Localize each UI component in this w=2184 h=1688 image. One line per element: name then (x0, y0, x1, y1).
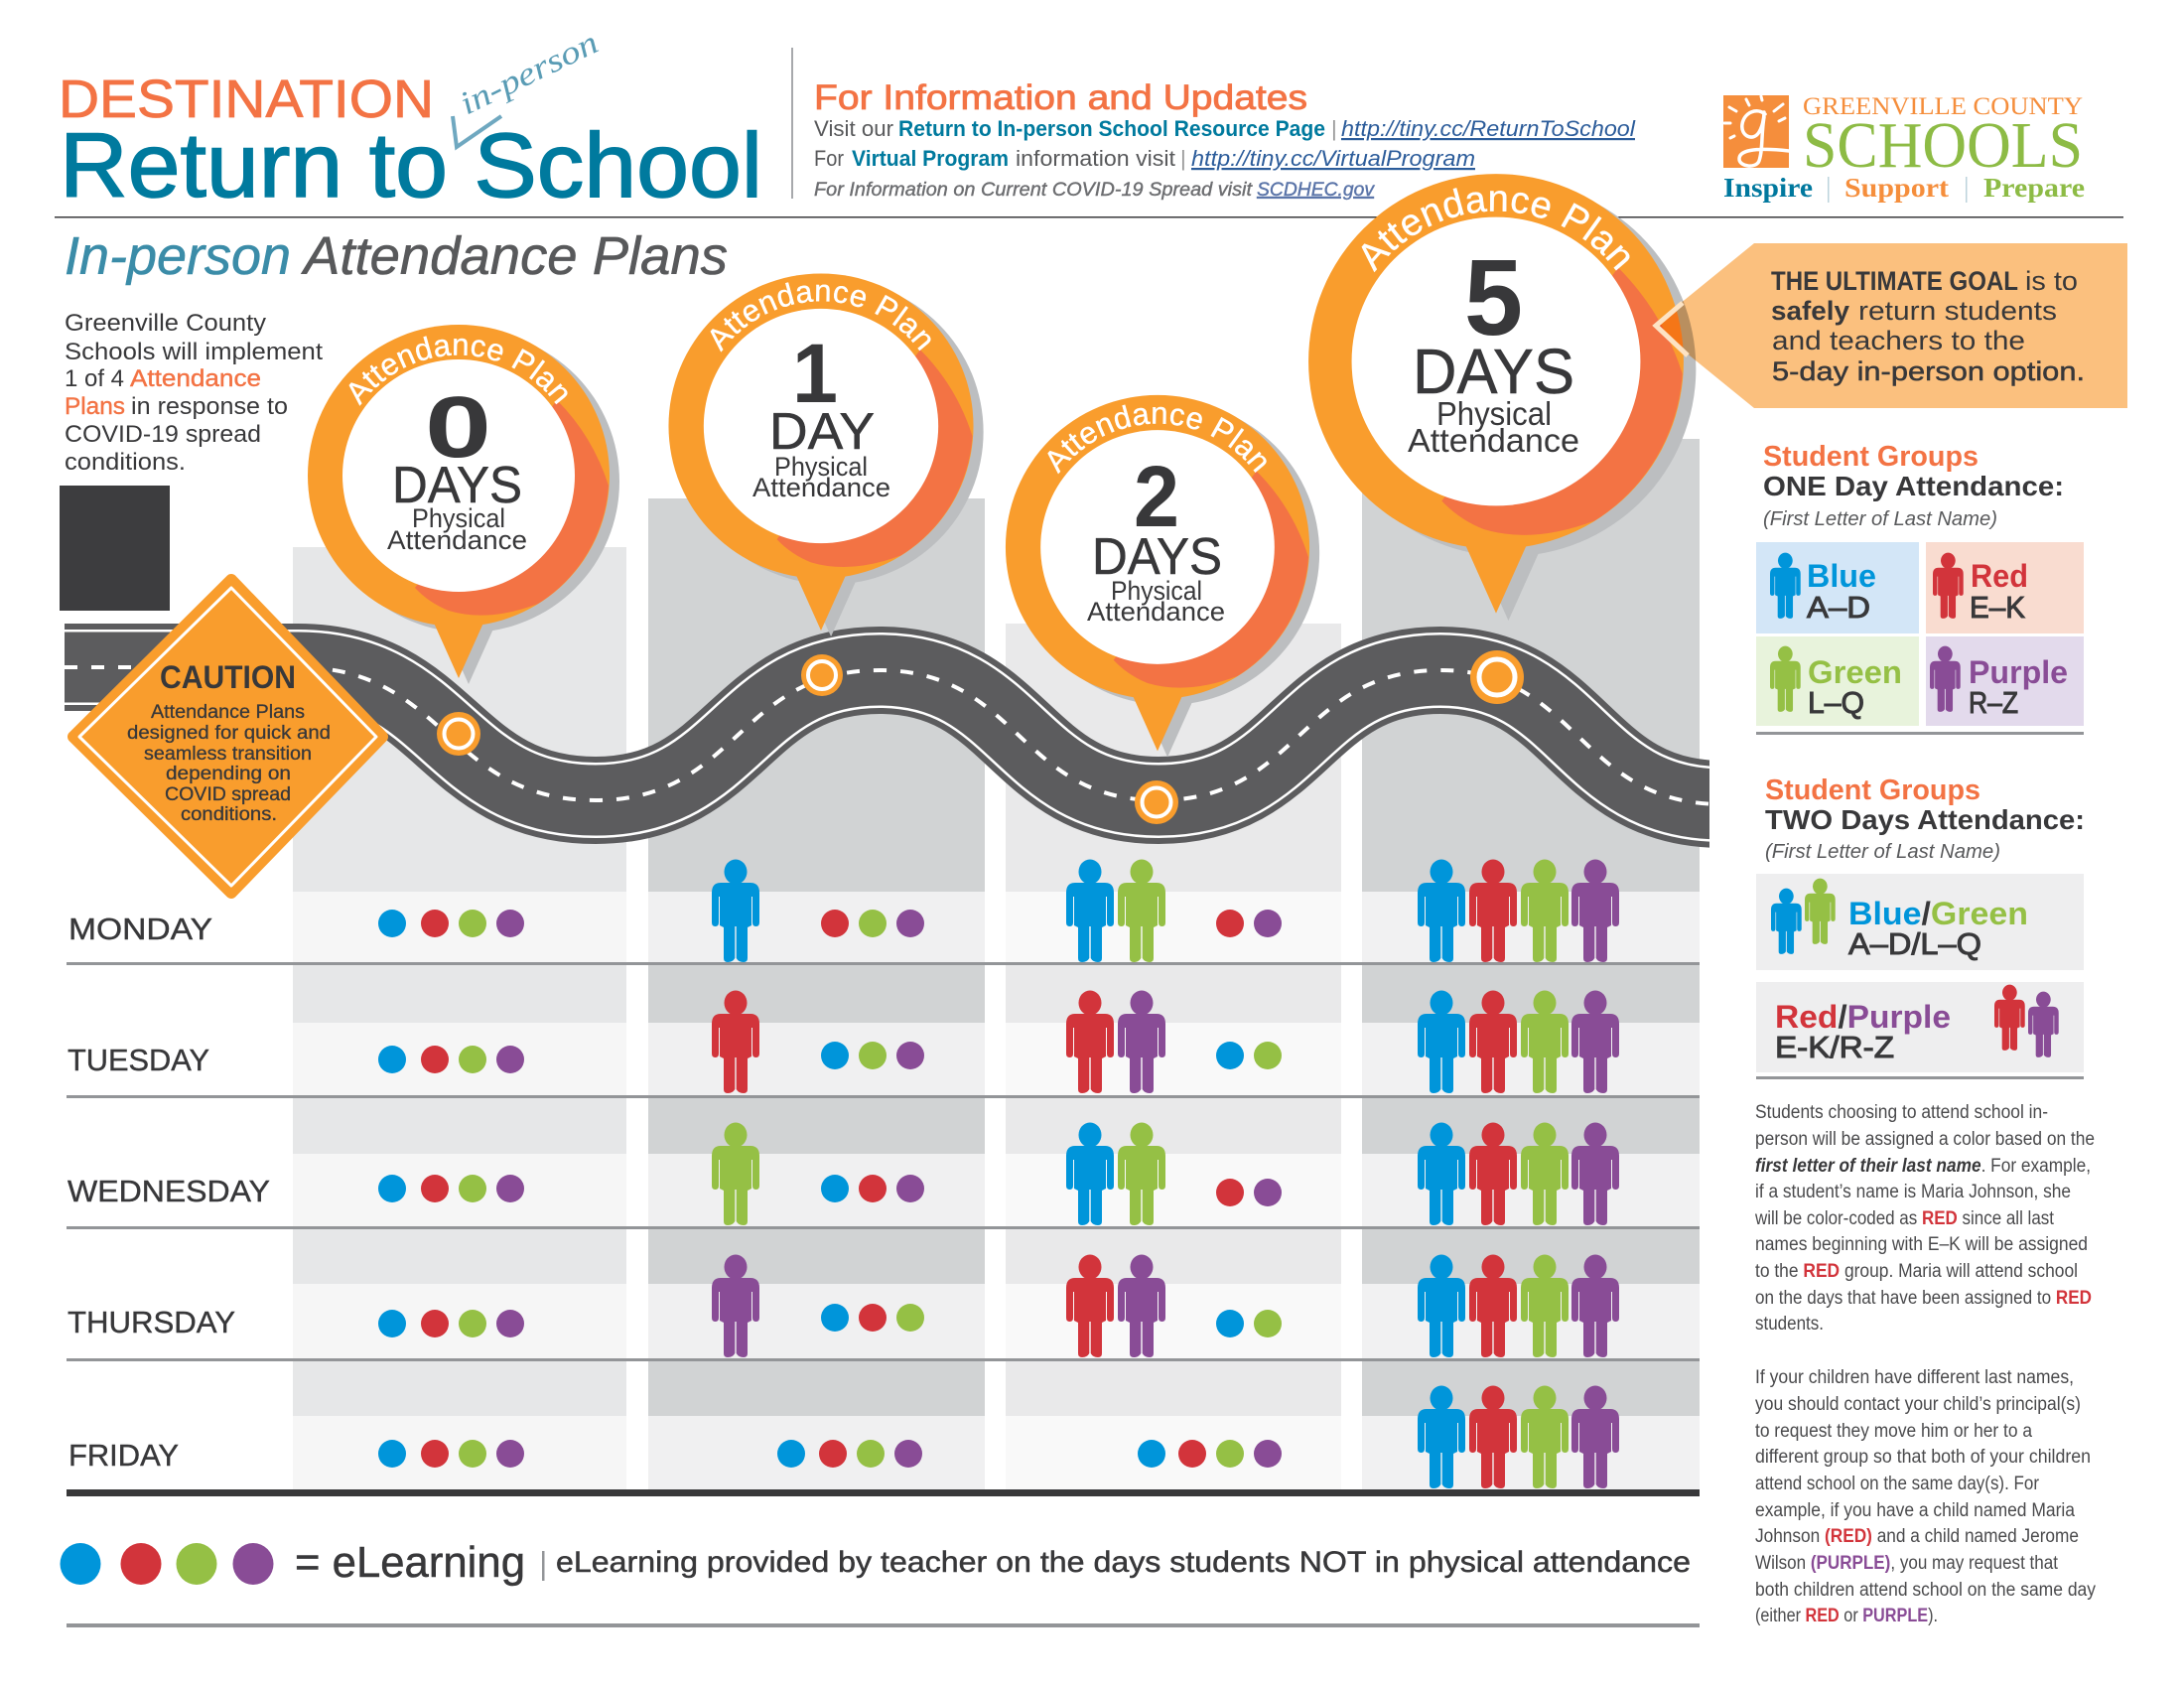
pin: 2 days: 2 (1134, 449, 1179, 545)
caution diamond: designed for quick and (127, 723, 331, 744)
row label: Thursday: THURSDAY (68, 1305, 235, 1339)
icon: sun and g (1723, 95, 1789, 168)
row label: Tuesday: TUESDAY (68, 1043, 209, 1077)
row label: Monday: MONDAY (68, 912, 212, 946)
heading: In-person Attendance Plans: Attendance Plans (301, 226, 728, 286)
group: blue and green (1756, 874, 2084, 970)
group: purple: R–Z (1969, 685, 2018, 720)
virtual program line: information visit (1016, 146, 1175, 171)
caution diamond: conditions. (181, 804, 277, 825)
marker: plan 1 road stop (801, 654, 843, 696)
text block: intro: conditions. (65, 449, 186, 476)
caution diamond (73, 580, 382, 893)
pin: 0 days (308, 325, 619, 684)
tagline: Inspire Support Prepare: Inspire (1723, 173, 1813, 203)
marker: plan 2 road stop (1135, 780, 1178, 824)
marker: plan 5 road stop (1470, 650, 1524, 704)
text block: intro: 1 of 4 (65, 365, 124, 392)
group: blue and green: A–D/L–Q (1848, 926, 1981, 961)
legend: elearning: = eLearning (295, 1538, 525, 1587)
text block: color assignment explanation: students. (1755, 1314, 1824, 1335)
text block: color assignment explanation: to the RED group. Maria will attend school (1755, 1261, 2078, 1282)
group: red: Red (1971, 558, 2028, 594)
text block: children with different last names: different group so that both of your children (1755, 1447, 2091, 1468)
pin: 2 days: Attendance Plan (1047, 405, 1267, 475)
resource page line: Visit our (814, 116, 893, 141)
row label: Friday: FRIDAY (68, 1438, 179, 1473)
text block: intro: Attendance (130, 365, 261, 392)
text block: color assignment explanation: on the days that have been assigned to RED (1755, 1288, 2092, 1309)
text block: color assignment explanation: person will be assigned a color based on the (1755, 1129, 2095, 1150)
heading: student groups one day: ONE Day Attendance: (1763, 471, 2064, 501)
logo: Greenville County Schools (1723, 93, 2085, 203)
text block: children with different last names: attend school on the same day(s). For (1755, 1474, 2040, 1494)
group: red and purple: E-K/R-Z (1775, 1030, 1894, 1064)
pin: 2 days: Physical (1111, 576, 1202, 606)
virtual program line: Virtual Program (852, 146, 1009, 171)
pin: 2 days: Attendance (1087, 597, 1225, 627)
text block: color assignment explanation: if a student’s name is Maria Johnson, she (1755, 1182, 2071, 1202)
caution diamond: CAUTION (160, 659, 296, 695)
tagline: Inspire Support Prepare (1723, 173, 2085, 203)
heading: for information and updates: For Information and Updates (814, 78, 1307, 117)
text block: children with different last names: Johnson (RED) and a child named Jerome (1755, 1526, 2079, 1547)
heading: In-person Attendance Plans (65, 226, 728, 286)
covid spread line: For Information on Current COVID-19 Spread visit (814, 180, 1253, 201)
heading: student groups one day (1763, 441, 2064, 530)
group: blue: A–D (1807, 590, 1870, 625)
text block: intro (65, 310, 323, 476)
heading: student groups two days: (First Letter of Last Name) (1765, 841, 2000, 863)
pin: 1 day (669, 274, 984, 636)
heading: In-person Attendance Plans: In-person (65, 226, 291, 286)
pin: 0 days: DAYS (392, 457, 522, 514)
caution diamond: Attendance Plans (151, 702, 305, 723)
text block: color assignment explanation (1754, 1102, 2095, 1335)
group: blue: Blue (1807, 558, 1876, 594)
legend: elearning: eLearning provided by teacher on the days students NOT in physical attendance (556, 1546, 1691, 1579)
text block: information and updates (814, 78, 1636, 201)
column: 1 day people and dots (712, 860, 924, 1468)
text block: children with different last names: example, if you have a child named Maria (1755, 1500, 2075, 1521)
callout: ultimate goal: is to (2025, 266, 2078, 296)
text block: intro: Plans (65, 393, 125, 420)
text block: children with different last names: If your children have different last names, (1755, 1367, 2074, 1388)
pin: 0 days: Attendance Plan (349, 336, 568, 406)
handwritten insert: in-person: in-person (455, 25, 604, 122)
heading: student groups two days: TWO Days Attendance: (1765, 804, 2085, 835)
pin: 1 day: Attendance (752, 473, 890, 502)
schedule columns (293, 439, 1700, 1490)
pin: 5 days: Physical (1436, 395, 1552, 432)
covid spread line: SCDHEC.gov (1257, 180, 1376, 201)
resource page line: Return to In-person School Resource Page (898, 116, 1325, 141)
logo text: Schools: SCHOOLS (1803, 109, 2083, 182)
pin: 0 days: Physical (412, 503, 505, 533)
text block: children with different last names: to request they move him or her to a (1755, 1421, 2032, 1442)
text block: children with different last names (1755, 1367, 2096, 1626)
text block: intro: Greenville County (65, 310, 266, 337)
row label: Wednesday: WEDNESDAY (68, 1174, 270, 1208)
title: DESTINATION: DESTINATION (59, 70, 434, 129)
virtual program line (814, 146, 1475, 171)
virtual program line: http://tiny.cc/VirtualProgram (1191, 146, 1475, 171)
resource page line (814, 116, 1636, 141)
group: red and purple: Red/Purple (1775, 999, 1951, 1035)
callout: ultimate goal: THE ULTIMATE GOAL (1771, 266, 2018, 296)
pin: 0 days: Attendance (387, 525, 527, 555)
callout: ultimate goal: and teachers to the (1772, 326, 2025, 355)
caution diamond: seamless transition (144, 744, 312, 765)
logo title: Destination Return to School (59, 25, 762, 216)
text block: intro: in response to (131, 393, 288, 420)
heading: student groups two days: Student Groups (1765, 774, 1980, 806)
text block: color assignment explanation: first letter of their last name. For example, (1755, 1156, 2091, 1177)
marker: plan 0 road stop (437, 712, 480, 756)
virtual program line: For (814, 146, 844, 171)
caution diamond: COVID spread (165, 784, 291, 805)
winding road (65, 667, 1722, 804)
column: 5 days people (1418, 860, 1619, 1488)
callout: ultimate goal: 5-day in-person option. (1772, 356, 2085, 386)
group: purple: Purple (1969, 654, 2068, 690)
group: blue and green: Blue/Green (1848, 896, 2028, 931)
virtual program line: | (1180, 146, 1186, 171)
callout: ultimate goal: return students (1858, 296, 2057, 326)
group: green (1756, 636, 1919, 726)
group: red and purple (1756, 982, 2084, 1072)
callout: ultimate goal: safely (1771, 296, 1849, 326)
pin: 5 days: Attendance Plan (1362, 188, 1630, 272)
resource page line: http://tiny.cc/ReturnToSchool (1341, 116, 1636, 141)
pin: 2 days: DAYS (1092, 528, 1222, 586)
tagline: Inspire Support Prepare: Prepare (1983, 173, 2085, 203)
tagline: Inspire Support Prepare: Support (1844, 173, 1949, 203)
group: green: Green (1808, 654, 1902, 690)
dark image block (60, 486, 170, 611)
text block: color assignment explanation: will be color-coded as RED since all last (1754, 1208, 2055, 1229)
text block: intro: Schools will implement (65, 339, 323, 365)
heading: student groups one day: (First Letter of Last Name) (1763, 508, 1997, 530)
text block: children with different last names: both children attend school on the same day (1755, 1580, 2096, 1601)
group: blue (1756, 542, 1919, 633)
pin: 1 day: Physical (774, 452, 868, 482)
panel: one day student groups (1756, 441, 2084, 735)
pin: 1 day: 1 (792, 327, 838, 420)
title: Return to School: Return to School (60, 115, 762, 216)
group: purple (1926, 636, 2084, 726)
pin: 1 day: DAY (769, 403, 875, 461)
group: green: L–Q (1808, 685, 1864, 720)
text block: children with different last names: (either RED or PURPLE). (1755, 1606, 1938, 1626)
heading: student groups one day: Student Groups (1763, 441, 1979, 473)
group: red (1926, 542, 2084, 633)
heading: student groups two days (1765, 774, 2085, 863)
pin: 5 days (1308, 174, 1696, 620)
logo text: Greenville County: GREENVILLE COUNTY (1803, 93, 2083, 120)
text block: color assignment explanation: Students choosing to attend school in- (1755, 1102, 2048, 1123)
legend: elearning (60, 1538, 1691, 1587)
resource page line: | (1331, 116, 1337, 141)
text block: color assignment explanation: names beginning with E–K will be assigned (1755, 1234, 2088, 1255)
column: 2 days people and dots (1066, 860, 1282, 1468)
pin: 2 days (1005, 395, 1320, 757)
caution diamond: depending on (166, 764, 291, 784)
pin: 1 day: Attendance Plan (711, 282, 931, 352)
text block: intro: COVID-19 spread (65, 421, 261, 448)
group: red: E–K (1970, 590, 2025, 625)
pin: 5 days: DAYS (1413, 336, 1574, 407)
text block: children with different last names: you should contact your child’s principal(s) (1755, 1394, 2081, 1415)
pin: 5 days: 5 (1464, 237, 1523, 358)
column: 0 days elearning dots (378, 910, 524, 1468)
panel: two days student groups (1756, 774, 2085, 1079)
text block: children with different last names: Wilson (PURPLE), you may request that (1755, 1553, 2059, 1574)
handwritten insert: in-person (453, 25, 604, 147)
pin: 5 days: Attendance (1408, 422, 1579, 459)
pin: 0 days: 0 (425, 379, 491, 476)
callout: ultimate goal (1653, 243, 2127, 408)
